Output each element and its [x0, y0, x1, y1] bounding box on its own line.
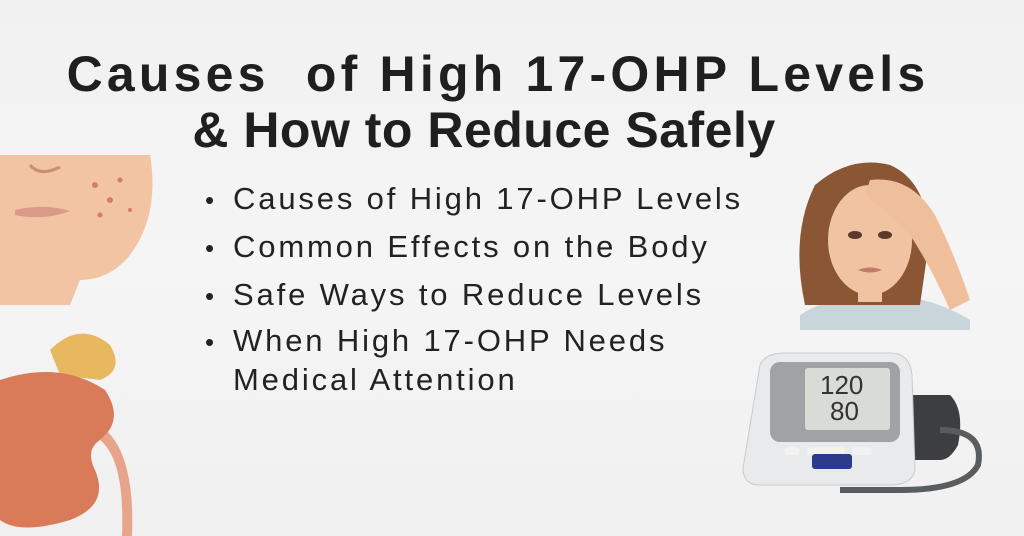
bullet: reduce: • — [205, 281, 214, 311]
bullet: medical — [205, 323, 667, 397]
bullet: causes: Causes of High 17-OHP Levels — [233, 181, 743, 216]
icon: kidney with adrenal gland — [0, 334, 132, 536]
bullet: medical: • — [205, 327, 214, 357]
bullet: medical: When High 17-OHP Needs — [233, 323, 667, 358]
icon: blood pressure monitor — [742, 352, 982, 493]
bullet: effects: • — [205, 233, 214, 263]
bullet: reduce: Safe Ways to Reduce Levels — [233, 277, 704, 312]
bullet: effects: Common Effects on the Body — [233, 229, 710, 264]
icon: blood pressure monitor: 120 — [820, 370, 863, 400]
icon: blood pressure monitor: 80 — [830, 396, 859, 426]
title — [67, 46, 929, 158]
bullet: causes: • — [205, 185, 214, 215]
bullet list — [205, 181, 743, 397]
bullet: medical: Medical Attention — [233, 362, 518, 397]
icon: woman with headache — [799, 162, 970, 330]
title: & How to Reduce Safely — [192, 102, 776, 158]
icon: face with acne — [0, 155, 152, 305]
title: Causes of High 17-OHP Levels — [67, 46, 929, 102]
